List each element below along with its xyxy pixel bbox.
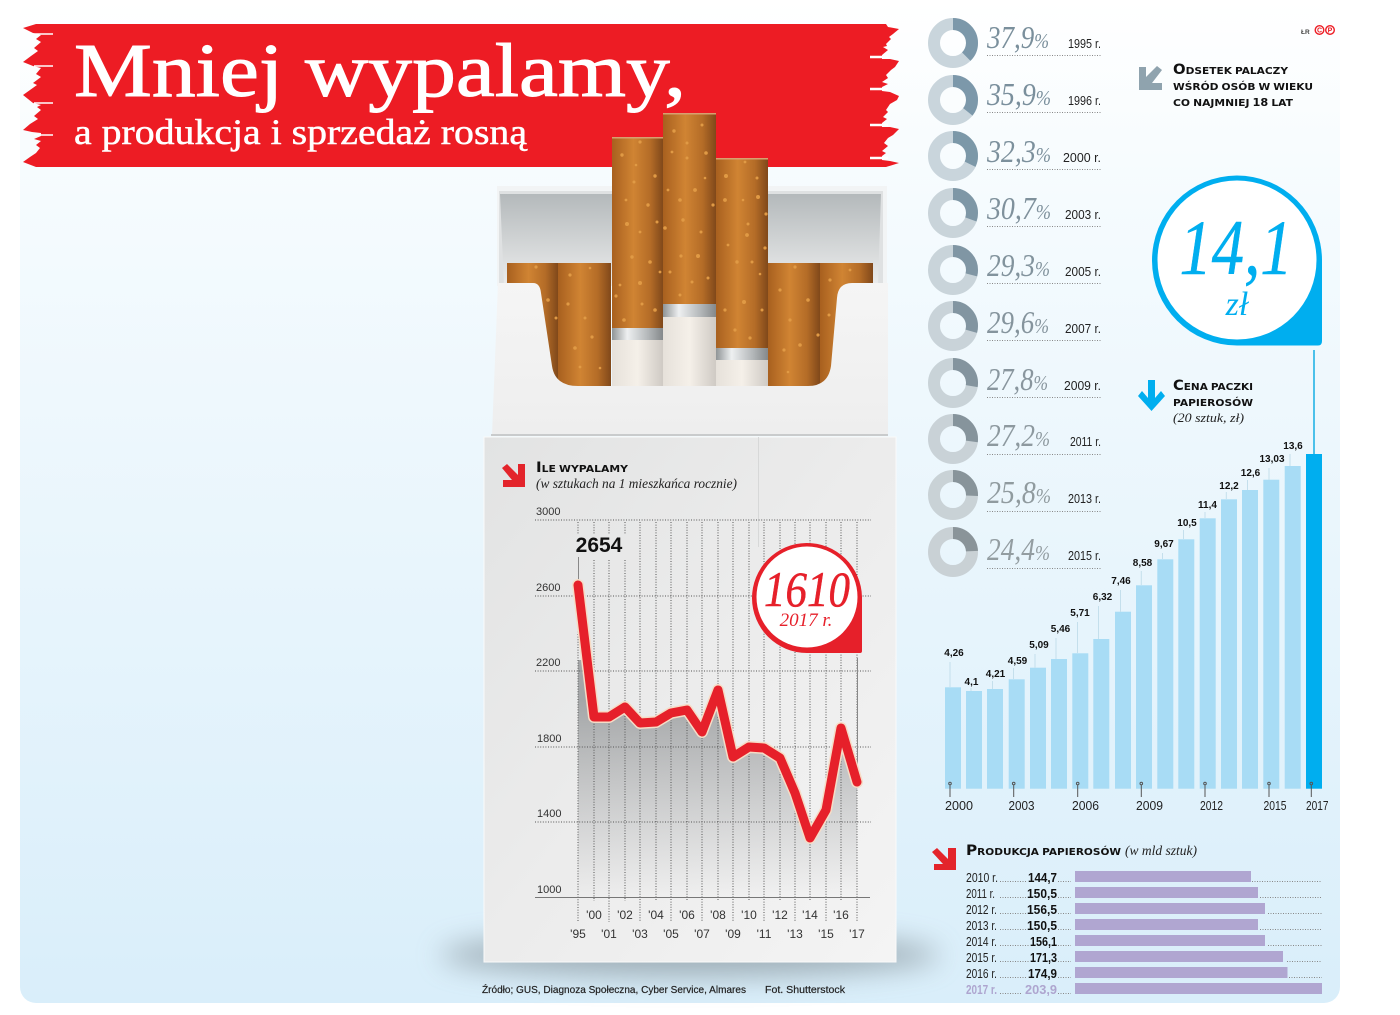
callout: 14,1 zł: zł — [1225, 286, 1250, 323]
x labels: '03 — [632, 927, 648, 941]
year labels: 2017 — [1306, 799, 1329, 813]
x labels: '17 — [849, 927, 865, 941]
donut 2013: 2013 r. — [1068, 492, 1101, 506]
year labels: 2000 — [945, 799, 973, 813]
connector to 2017 bar — [1313, 350, 1315, 455]
value labels: 8,58 — [1133, 558, 1153, 569]
row 2014: 156,1 — [1030, 934, 1057, 949]
row 2017: 203,9 — [1025, 982, 1057, 997]
cigarette pack — [484, 113, 896, 962]
footer: source: Fot. Shutterstock — [765, 984, 846, 996]
row 2011: 150,5 — [1027, 886, 1057, 901]
callout: 14,1 zł: 14,1 — [1180, 204, 1292, 291]
pack shadow — [440, 933, 940, 977]
author credit: C — [1317, 28, 1322, 34]
back cigarettes — [507, 263, 873, 386]
heading: ile wypalamy: Ile wypalamy — [536, 460, 629, 476]
donut 2007: 29,6% — [987, 304, 1049, 340]
value labels: 4,1 — [965, 677, 979, 688]
row 2011: 2011 r. — [966, 886, 995, 901]
heading: ile wypalamy — [502, 460, 737, 491]
x labels: '15 — [818, 927, 834, 941]
row 2010: 2010 r. — [966, 870, 998, 885]
donut 2003 — [934, 190, 1101, 232]
value labels: 7,46 — [1111, 576, 1131, 587]
heading: produkcja papierosow — [932, 843, 1198, 870]
axis labels: 2600 — [536, 582, 560, 594]
bar list: cigarette production — [966, 870, 1322, 997]
pack front pocket — [492, 283, 888, 435]
donut 1996: 35,9% — [986, 76, 1051, 112]
year ticks — [949, 782, 1313, 797]
x labels: '10 — [741, 908, 757, 922]
row 2015: 171,3 — [1030, 950, 1057, 965]
donut 2005: 2005 r. — [1065, 265, 1101, 279]
heading: cena paczki: Cena paczki — [1173, 378, 1253, 394]
row 2016: 174,9 — [1028, 966, 1057, 981]
cigarette middle — [663, 113, 716, 387]
donut 1996 — [934, 76, 1101, 119]
donut 2000 — [934, 133, 1101, 175]
row 2016 — [966, 966, 1322, 981]
bar chart: pack price — [944, 441, 1329, 813]
axis labels: 1400 — [537, 808, 561, 820]
row 2016: 2016 r. — [966, 966, 997, 981]
donut 2015: 2015 r. — [1068, 549, 1101, 563]
x labels: '00 — [586, 908, 602, 922]
row 2015 — [966, 950, 1322, 965]
title: Mniej wypalamy, — [74, 29, 686, 113]
donut 2015: 24,4% — [987, 531, 1050, 567]
heading: cena paczki: (20 sztuk, zł) — [1173, 410, 1244, 425]
value labels — [944, 441, 1303, 688]
row 2013 — [966, 918, 1322, 933]
heading: cena paczki: papierosów — [1173, 394, 1253, 410]
row 2011 — [966, 886, 1322, 901]
value labels: 5,09 — [1029, 640, 1049, 651]
x labels: '04 — [648, 908, 664, 922]
donut 2003: 30,7% — [986, 190, 1051, 226]
subtitle: a produkcja i sprzedaż rosną — [74, 112, 528, 152]
row 2013: 2013 r. — [966, 918, 997, 933]
pack lower panel — [484, 437, 896, 962]
icon: red arrow — [932, 848, 956, 870]
pack lid interior — [497, 186, 887, 286]
x labels: '14 — [802, 908, 818, 922]
axis labels: 1000 — [537, 884, 561, 896]
panel: smokers share donuts — [934, 19, 1101, 571]
bars — [945, 454, 1322, 789]
leader lines — [950, 454, 1290, 691]
value labels: 6,32 — [1093, 592, 1113, 603]
year labels: 2015 — [1264, 799, 1287, 813]
heading: produkcja papierosow: Produkcja papierosów — [966, 843, 1121, 859]
donut 1995 — [934, 19, 1101, 62]
donut 1995: 1995 r. — [1068, 37, 1101, 51]
year labels: 2003 — [1008, 799, 1035, 813]
value: 2654: 2654 — [576, 534, 623, 557]
x labels: '08 — [710, 908, 726, 922]
donut 2007 — [934, 304, 1101, 345]
axis labels — [536, 506, 561, 896]
row 2014: 2014 r. — [966, 934, 997, 949]
heading: cena paczki — [1138, 378, 1253, 425]
x labels: '11 — [757, 927, 772, 941]
row 2010: 144,7 — [1028, 870, 1057, 885]
donut 2000: 2000 r. — [1063, 151, 1101, 165]
value labels: 4,21 — [986, 669, 1006, 680]
heading: odsetek palaczy: Odsetek palaczy — [1173, 62, 1289, 78]
row 2017 — [966, 982, 1322, 997]
callout: 14,1 zł — [1152, 175, 1322, 346]
title banner — [23, 24, 899, 167]
row 2012 — [966, 902, 1322, 917]
row 2010 — [966, 870, 1322, 885]
x labels: '06 — [679, 908, 695, 922]
grid lines — [535, 520, 871, 822]
heading: produkcja papierosow: (w mld sztuk) — [1125, 843, 1198, 858]
axis labels: 2200 — [536, 657, 560, 669]
donut 2003: 2003 r. — [1065, 208, 1101, 222]
area under line — [578, 660, 857, 897]
year labels: 2009 — [1136, 799, 1163, 813]
year labels: 2012 — [1200, 799, 1223, 813]
donut 2009 — [934, 361, 1101, 402]
heading: odsetek palaczy: co najmniej 18 lat — [1173, 94, 1293, 110]
value labels: 12,2 — [1219, 481, 1239, 492]
icon: red arrow — [502, 464, 525, 487]
author credit — [1301, 26, 1334, 36]
x labels — [570, 908, 865, 941]
donut 2015 — [934, 531, 1101, 571]
year labels: 2006 — [1072, 799, 1099, 813]
x labels: '12 — [772, 908, 788, 922]
donut 2000: 32,3% — [986, 133, 1051, 169]
year labels — [945, 799, 1329, 813]
value labels: 13,6 — [1283, 441, 1303, 452]
callout: 1610: 2017 r. — [780, 610, 832, 631]
value labels: 4,59 — [1008, 656, 1028, 667]
icon: grey arrow — [1139, 66, 1162, 90]
row 2013: 150,5 — [1027, 918, 1057, 933]
x labels: '13 — [787, 927, 803, 941]
donut 1995: 37,9% — [986, 19, 1049, 55]
author credit: P — [1328, 28, 1333, 34]
donut 2005 — [934, 247, 1101, 289]
heading: odsetek palaczy — [1139, 62, 1313, 110]
x labels: '05 — [663, 927, 679, 941]
row 2012: 156,5 — [1027, 902, 1057, 917]
leader lines — [578, 557, 858, 782]
row 2015: 2015 r. — [966, 950, 997, 965]
value labels: 5,46 — [1051, 624, 1071, 635]
donut 1996: 1996 r. — [1068, 94, 1101, 108]
data line — [578, 585, 857, 838]
x labels: '95 — [570, 927, 586, 941]
author credit: ŁR — [1301, 29, 1310, 36]
value labels: 5,71 — [1070, 608, 1090, 619]
donut 2009: 27,8% — [987, 361, 1048, 397]
donut 2013: 25,8% — [987, 474, 1051, 510]
value labels: 13,03 — [1259, 454, 1285, 465]
value labels: 10,5 — [1177, 518, 1197, 529]
donut 2011 — [934, 417, 1101, 458]
row 2017: 2017 r. — [966, 982, 997, 997]
heading: odsetek palaczy: wśród osób w wieku — [1173, 78, 1313, 94]
callout: 1610: 1610 — [764, 561, 850, 617]
donut 2011: 2011 r. — [1070, 435, 1101, 449]
donut 2013 — [934, 474, 1101, 514]
heading: ile wypalamy: (w sztukach na 1 mieszkańca rocznie) — [536, 476, 737, 491]
callout: 1610 — [752, 543, 862, 653]
x labels: '01 — [601, 927, 617, 941]
axis labels: 1800 — [537, 733, 561, 745]
x labels: '07 — [694, 927, 710, 941]
row 2012: 2012 r. — [966, 902, 997, 917]
axis labels: 3000 — [536, 506, 560, 518]
value labels: 12,6 — [1241, 468, 1261, 479]
cigarette left — [612, 137, 663, 387]
icon: blue arrow — [1138, 380, 1165, 411]
value labels: 4,26 — [944, 648, 964, 659]
donut 2005: 29,3% — [987, 247, 1050, 283]
x labels: '09 — [725, 927, 741, 941]
footer: source: Źródło; GUS, Diagnoza Społeczna, Cyber Service, Almares — [482, 983, 746, 996]
x labels: '02 — [617, 908, 633, 922]
cigarette right — [716, 158, 768, 387]
value labels: 9,67 — [1154, 539, 1174, 550]
x labels: '16 — [833, 908, 849, 922]
value labels: 11,4 — [1198, 500, 1217, 511]
row 2014 — [966, 934, 1322, 949]
line chart: cigarettes per capita — [535, 506, 871, 941]
donut 2011: 27,2% — [987, 417, 1050, 453]
donut 2009: 2009 r. — [1064, 379, 1101, 393]
baseline — [535, 896, 870, 898]
donut 2007: 2007 r. — [1065, 322, 1101, 336]
